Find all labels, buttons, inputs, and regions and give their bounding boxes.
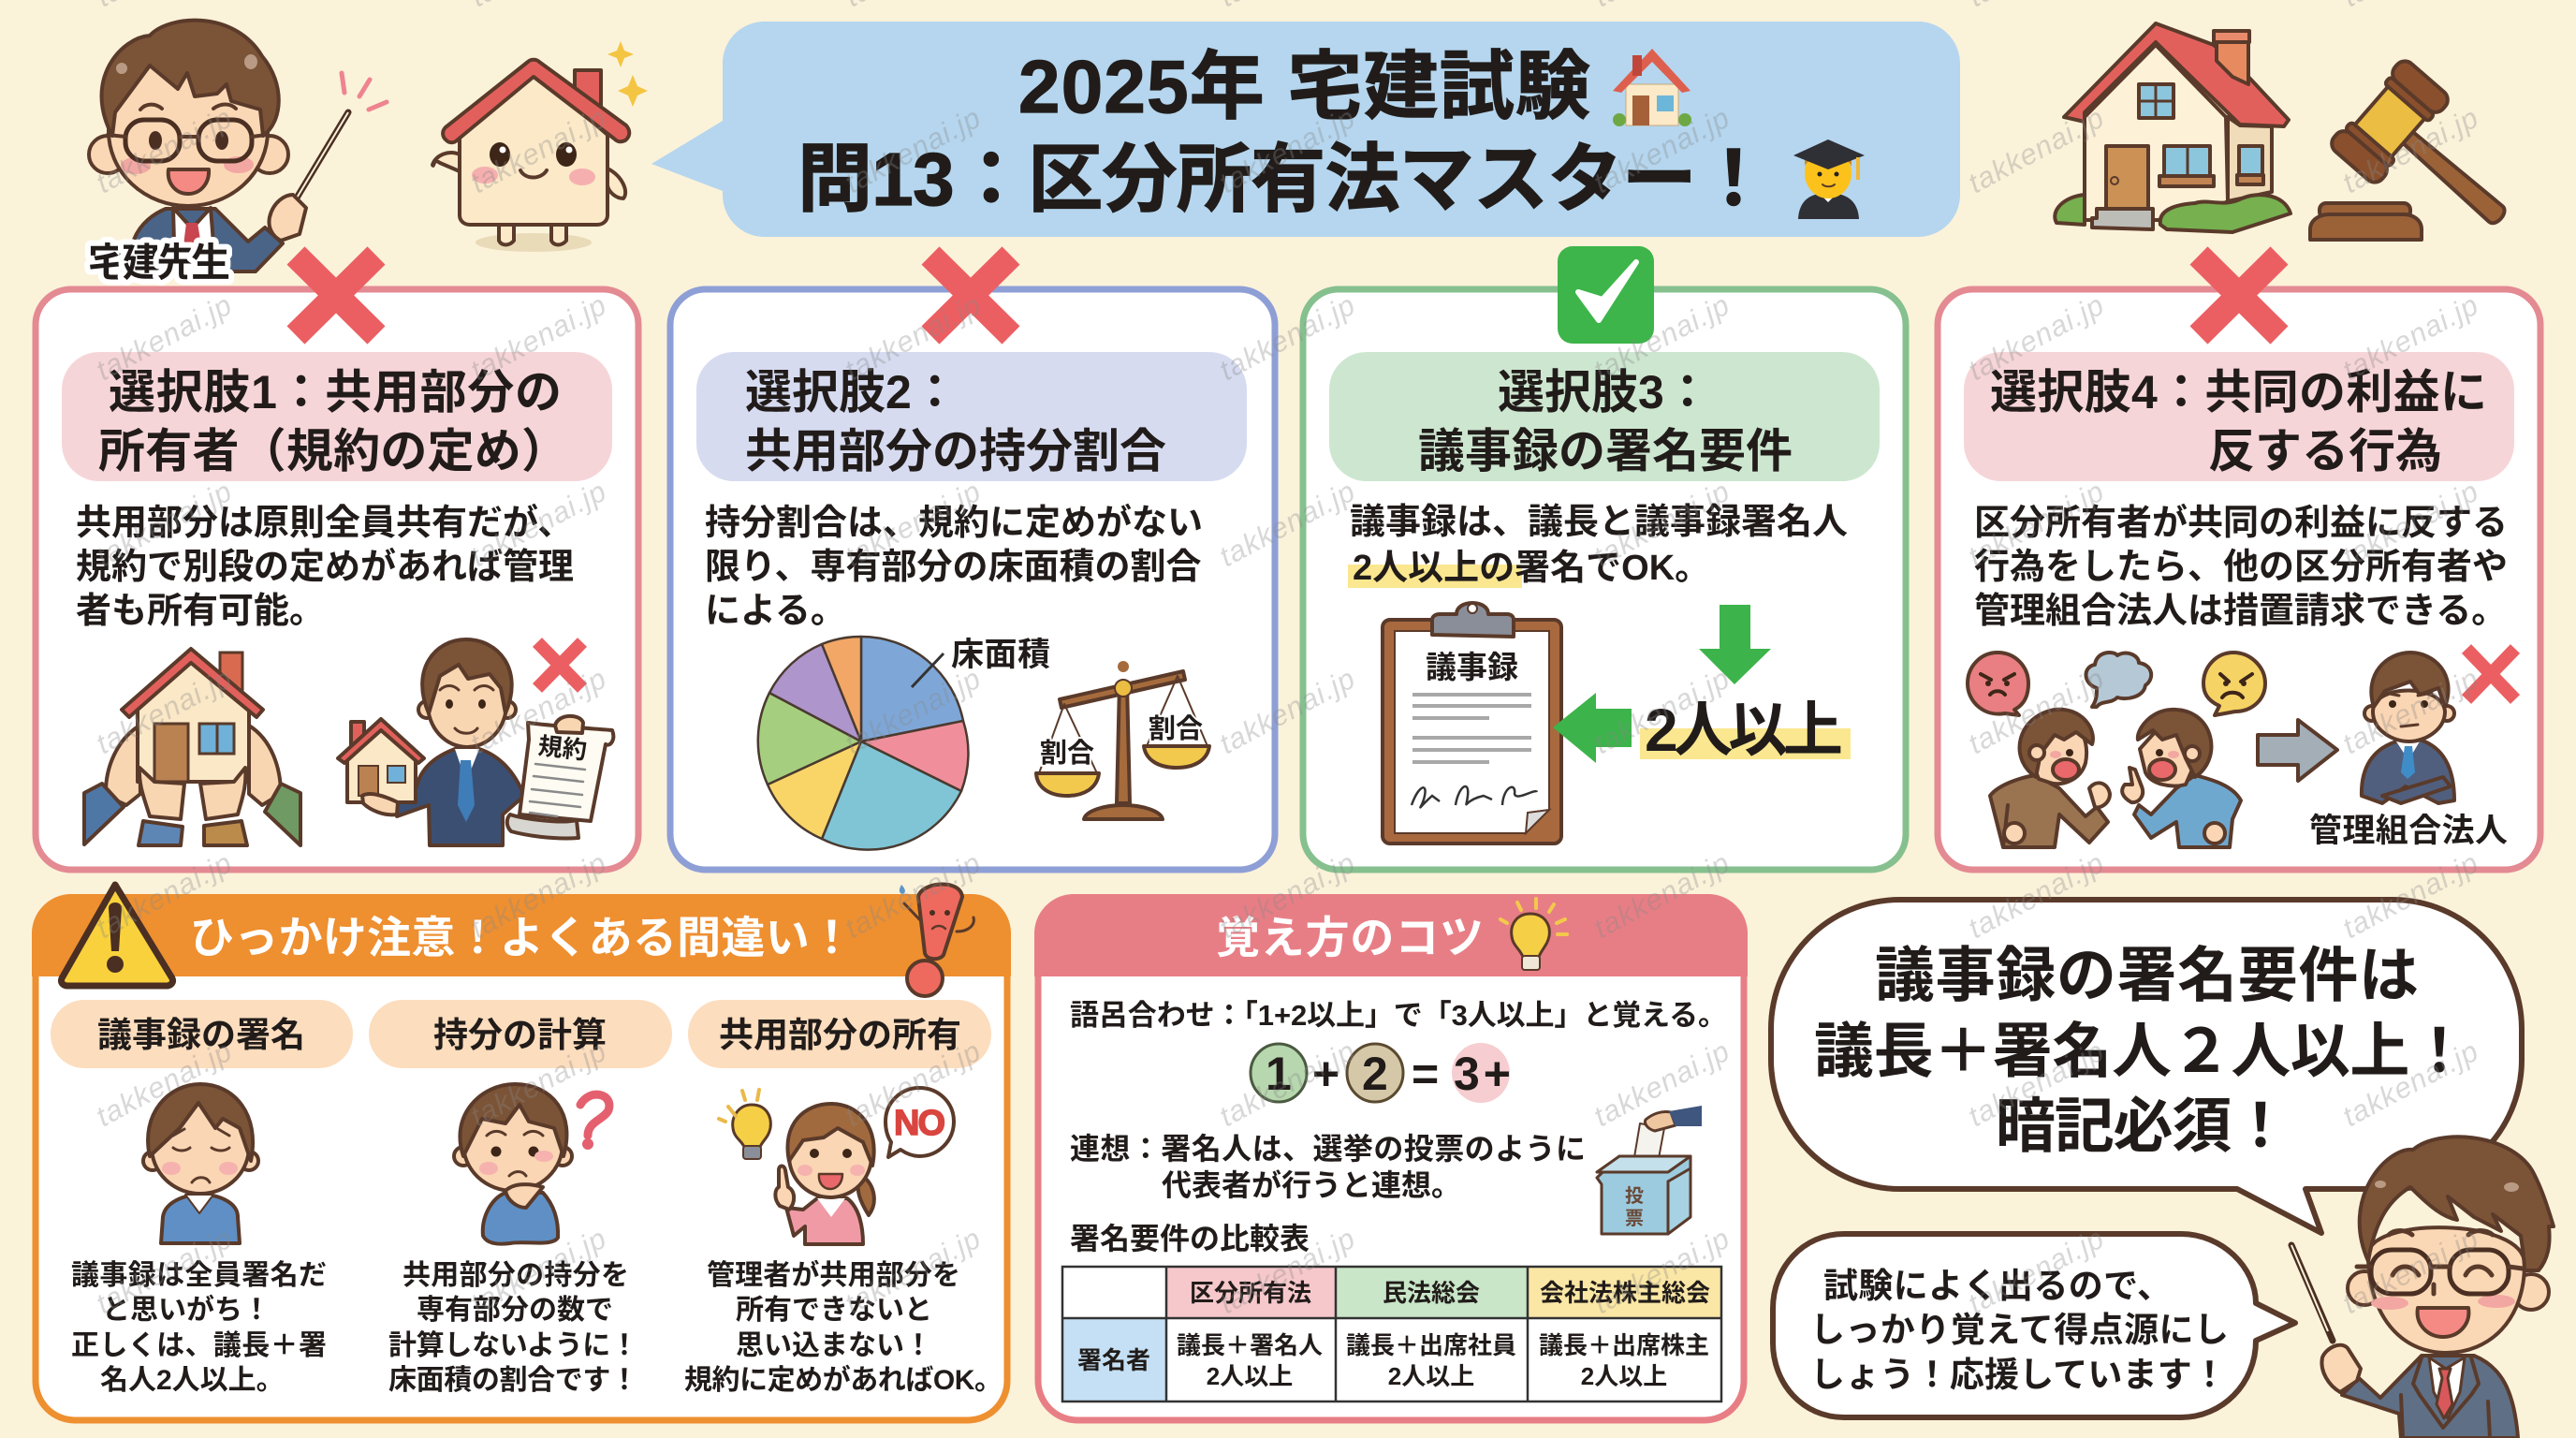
body text 3: 議事録は、議長と議事録署名人 [1350,503,1848,542]
character: teacher top left [88,21,387,285]
heading pill 4 [1964,352,2514,481]
scale label right: 割合 [1149,713,1203,744]
table: signature comparison: 署名者 [1077,1346,1150,1374]
watermark grid: takkenai.jp [840,662,987,760]
ballot box label: 投 [1625,1185,1644,1207]
mistake column 3 [684,1000,1003,1396]
callout: two or more: 2人以上 [1645,697,1843,764]
watermark grid: takkenai.jp [1588,1034,1735,1133]
watermark grid: takkenai.jp [840,288,987,387]
icon: house emoji [1613,49,1691,126]
big bubble text: 議事録の署名要件は [1875,942,2419,1009]
pill: share calculation: 持分の計算 [433,1016,607,1054]
watermark grid: takkenai.jp [1214,101,1361,199]
watermark grid: takkenai.jp [2337,101,2484,199]
illustration: gavel [2310,57,2539,262]
text: mistake 3: 思い込まない！ [736,1330,932,1361]
icon: warning triangle [61,885,173,986]
body text 1: 規約で別段の定めがあれば管理 [76,548,574,587]
body text 2 [705,504,1203,631]
character: teacher bottom right [2291,1137,2554,1438]
body text 3 [1348,503,1848,588]
character: girl pointing [775,1104,874,1244]
watermark grid: takkenai.jp [1963,288,2110,387]
watermark grid: takkenai.jp [1214,1034,1361,1133]
equation: 1 + 2 = 3+: 3+ [1454,1048,1511,1100]
watermark grid: takkenai.jp [1963,1222,2110,1320]
heading pill 1: 所有者（規約の定め） [98,425,568,477]
illustration: house top right [2055,23,2291,232]
icon: ballot box [1597,1106,1702,1234]
watermark grid: takkenai.jp [2337,1222,2484,1320]
body text 2: による。 [705,592,846,631]
watermark grid: takkenai.jp [91,475,238,573]
watermark grid: takkenai.jp [465,1034,612,1133]
illustration: hands holding house [84,649,300,845]
table: signature comparison: 民法総会 [1383,1279,1480,1307]
watermark grid: takkenai.jp [840,1222,987,1320]
character: puzzled boy [454,1084,572,1244]
icon: idea bulb [719,1090,770,1159]
icon: question mark [580,1094,609,1150]
panel: choice 3 [1303,246,1906,870]
icon: small red cross [537,642,582,688]
watermark grid: takkenai.jp [840,101,987,199]
body text 1: 共用部分は原則全員共有だが、 [76,504,573,543]
watermark grid: takkenai.jp [91,101,238,199]
heading pill 2 [696,352,1247,481]
text: mistake 1: 名人2人以上。 [100,1365,285,1396]
icon: angry yellow bubble [2203,653,2265,715]
title line 1: 2025年 宅建試験 [1018,45,1590,128]
heading pill 3 [1329,352,1880,481]
text: mistake 1 [71,1260,327,1396]
callout: small speech bubble [1773,1234,2295,1417]
watermark grid: takkenai.jp [1214,846,1361,945]
heading pill 3: 議事録の署名要件 [1418,425,1793,477]
character: arguing man left [1990,710,2110,847]
clipboard title: 議事録 [1426,650,1518,684]
watermark grid: takkenai.jp [1214,662,1361,760]
icon: red cross 2 [930,256,1011,335]
watermark grid: takkenai.jp [1963,662,2110,760]
table: signature comparison: 議長＋出席株主 [1539,1331,1709,1359]
watermark grid: takkenai.jp [1963,846,2110,945]
illustration: minutes clipboard [1383,603,1561,844]
watermark grid: takkenai.jp [1963,101,2110,199]
watermark grid: takkenai.jp [91,288,238,387]
watermark grid: takkenai.jp [2337,475,2484,573]
pill: common area ownership [688,1000,991,1068]
panel: choice 1 [36,256,638,870]
watermark grid: takkenai.jp [1588,288,1735,387]
mistake column 1 [51,1000,353,1396]
icon: cross over manager [2466,649,2515,699]
text: mistake 2: 計算しないように！ [388,1330,638,1361]
panel: common mistakes [32,884,1011,1420]
watermark grid: takkenai.jp [465,288,612,387]
text: mistake 2: 床面積の割合です！ [388,1365,638,1396]
character: association manager [2309,649,2515,849]
heading pill 4: 反する行為 [2208,425,2442,477]
text: mistake 1: 正しくは、議長＋署 [71,1330,327,1361]
small bubble text [1810,1267,2229,1394]
label: teacher name: 宅建先生 [88,241,230,285]
watermark grid: takkenai.jp [91,1222,238,1320]
watermark grid: takkenai.jp [840,1034,987,1133]
pill: share calculation [369,1000,672,1068]
text: mnemonic: 語呂合わせ：「1+2以上」で「3人以上」と覚える。 [1070,999,1727,1032]
body text 1: 者も所有可能。 [76,592,325,631]
table: signature comparison: 2人以上 [1207,1362,1293,1390]
big bubble text: 暗記必須！ [1996,1093,2291,1160]
table: signature comparison: 区分所有法 [1190,1279,1311,1307]
watermark grid: takkenai.jp [1963,1034,2110,1133]
text: mistake 3: 規約に定めがあればOK。 [684,1364,1003,1396]
icon: grey cloud bubble [2086,653,2151,707]
text: association [1070,1132,1586,1202]
heading pill 1 [62,352,612,481]
body text 4 [1974,504,2508,631]
equation: 1 + 2 = 3+: 2 [1362,1048,1388,1100]
icon: angry red bubble [1968,653,2028,715]
watermark grid: takkenai.jp [2337,662,2484,760]
icon: graduate emoji [1793,139,1865,219]
text: comparison heading: 署名要件の比較表 [1070,1222,1310,1255]
arrow: green down [1699,605,1771,684]
highlight under key phrase [1348,565,1522,588]
pie label: 床面積 [951,637,1050,673]
pill: minutes signature [51,1000,353,1068]
text: mistake 3: 管理者が共用部分を [707,1259,960,1291]
text: mistake 3: 所有できないと [736,1295,932,1326]
ballot box label: 票 [1625,1209,1644,1229]
illustration: manager with rules [338,639,613,845]
label: management association: 管理組合法人 [2309,813,2508,849]
watermark grid: takkenai.jp [840,475,987,573]
panel: choice 2 [670,256,1275,870]
equation: 1 + 2 = 3+: + [1312,1048,1339,1100]
watermark grid: takkenai.jp [1214,1222,1361,1320]
pie label [912,637,1050,687]
table: signature comparison: 2人以上 [1388,1362,1474,1390]
watermark grid: takkenai.jp [465,1222,612,1320]
body text 2: 限り、専有部分の床面積の割合 [705,548,1201,587]
watermark grid: takkenai.jp [91,662,238,760]
text: association: 代表者が行うと連想。 [1162,1168,1461,1202]
small bubble text: しっかり覚えて得点源にし [1810,1311,2229,1349]
watermark grid: takkenai.jp [1214,475,1361,573]
pill: minutes signature: 議事録の署名 [97,1016,305,1054]
watermark grid: takkenai.jp [2337,846,2484,945]
watermark grid: takkenai.jp [91,846,238,945]
watermark grid: takkenai.jp [2337,1034,2484,1133]
character: smiling house mascot [432,41,648,252]
text: mistake 1: 議事録は全員署名だ [71,1260,327,1291]
small bubble text: 試験によく出るので、 [1823,1267,2172,1305]
table: signature comparison: 議長＋署名人 [1177,1331,1323,1359]
chart: pie of floor area [758,637,968,850]
scale label left: 割合 [1040,738,1094,769]
text: mistake 2 [388,1260,638,1396]
watermark grid: takkenai.jp [91,1034,238,1133]
arrow: green left [1553,693,1632,763]
mistake column 2 [369,1000,672,1396]
body text 2: 持分割合は、規約に定めがない [705,504,1203,543]
ballot box label [1625,1185,1644,1229]
big bubble text [1814,942,2469,1160]
icon: exclamation mascot [900,884,973,996]
watermark grid: takkenai.jp [1588,1222,1735,1320]
icon: NO speech bubble: NO [894,1104,945,1143]
icon: green check mark [1558,246,1654,344]
big bubble text: 議長＋署名人２人以上！ [1814,1018,2469,1085]
table: signature comparison: 議長＋出席社員 [1346,1331,1516,1359]
watermark grid: takkenai.jp [1214,288,1361,387]
pill: common area ownership: 共用部分の所有 [719,1016,961,1054]
watermark grid: takkenai.jp [1588,662,1735,760]
equation: 1 + 2 = 3+ [1251,1043,1511,1103]
body text 4: 管理組合法人は措置請求できる。 [1974,592,2507,631]
watermark grid: takkenai.jp [2337,288,2484,387]
watermark grid: takkenai.jp [1588,475,1735,573]
title line 2: 問13：区分所有法マスター！ [798,138,1771,221]
icon: red cross 4 [2199,256,2279,335]
icon: red cross 1 [296,256,376,335]
small bubble text: しょう！応援しています！ [1810,1356,2227,1394]
text: mistake 1: と思いがち！ [102,1294,271,1326]
heading pill 2: 共用部分の持分割合 [745,425,1166,477]
text: mistake 3 [684,1259,1003,1396]
character: sad boy [143,1084,258,1243]
watermark grid: takkenai.jp [1963,475,2110,573]
watermark grid: takkenai.jp [465,101,612,199]
heading pill 3: 選択肢3： [1498,366,1711,418]
watermark grid: takkenai.jp [840,846,987,945]
heading pill 4: 選択肢4：共同の利益に [1990,366,2487,418]
character: arguing man right [2122,710,2241,847]
body text 1 [76,504,574,631]
watermark grid: takkenai.jp [465,662,612,760]
equation: 1 + 2 = 3+: = [1412,1048,1439,1100]
heading pill 2: 選択肢2： [745,366,959,418]
body text 4: 区分所有者が共同の利益に反する [1974,504,2508,543]
scroll label: 規約 [536,731,588,765]
equation: 1 + 2 = 3+: 1 [1266,1048,1292,1100]
watermark grid: takkenai.jp [1588,101,1735,199]
watermark grid: takkenai.jp [465,475,612,573]
title speech bubble [651,22,1960,237]
watermark grid: takkenai.jp [1588,846,1735,945]
panel: choice 4 [1938,256,2540,870]
heading: tips: 覚え方のコツ [1216,913,1484,962]
icon: NO speech bubble [886,1088,954,1157]
table: signature comparison [1062,1267,1721,1401]
icon: light bulb [1500,899,1567,970]
text: mistake 2: 共用部分の持分を [402,1260,629,1291]
heading: mistakes: ひっかけ注意！よくある間違い！ [190,913,854,962]
panel: memorization tips [1034,894,1748,1420]
callout: big speech bubble [1771,900,2522,1233]
table: signature comparison: 会社法株主総会 [1540,1279,1710,1307]
table: signature comparison: 2人以上 [1581,1362,1667,1390]
heading pill 1: 選択肢1：共用部分の [109,366,562,418]
icon: balance scale [1036,661,1209,819]
body text 4: 行為をしたら、他の区分所有者や [1974,548,2508,587]
arrow: grey right [2258,720,2337,781]
watermark grid: takkenai.jp [465,846,612,945]
text: mistake 2: 専有部分の数で [417,1295,613,1326]
text: association: 連想：署名人は、選挙の投票のように [1070,1132,1586,1166]
body text 3: 2人以上の署名でOK。 [1353,549,1710,588]
